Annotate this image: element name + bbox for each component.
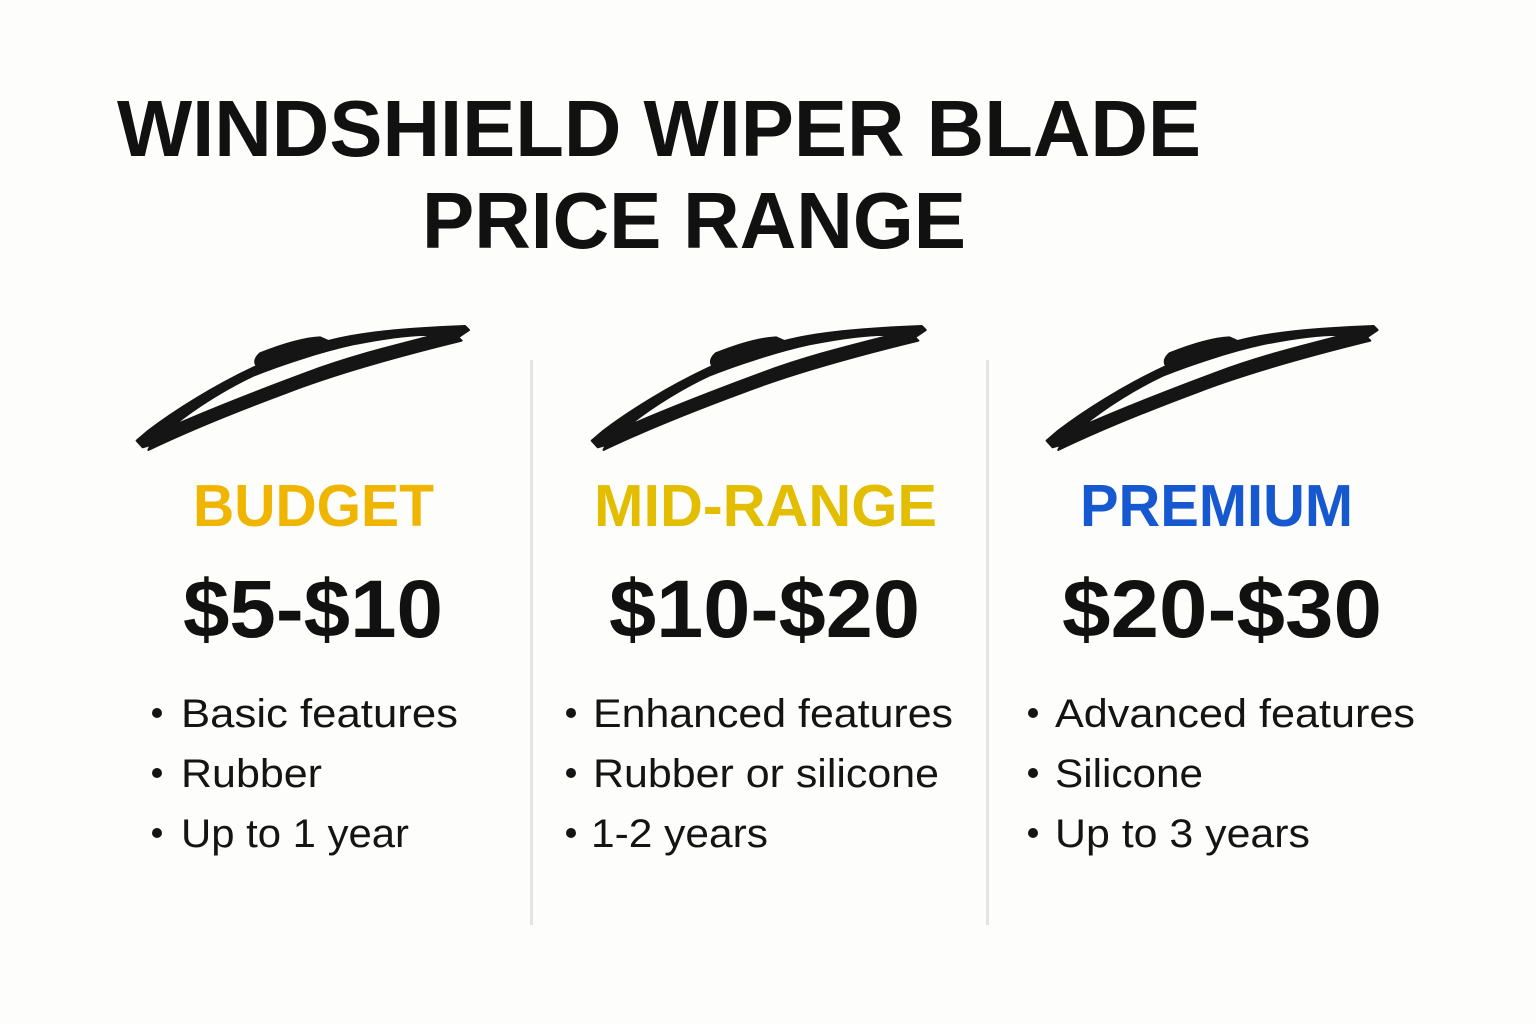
icon: wiper blade budget — [137, 326, 469, 450]
feature list: mid-range — [566, 692, 953, 856]
feature list: budget: Rubber — [181, 752, 322, 796]
heading: premium: PREMIUM — [1080, 473, 1353, 539]
panel: budget — [137, 326, 469, 856]
price: mid-range: $10-$20 — [609, 564, 920, 655]
price: budget: $5-$10 — [183, 564, 443, 655]
feature list: premium: Advanced features — [1055, 692, 1415, 736]
feature list: premium — [1028, 692, 1415, 856]
title: PRICE RANGE — [422, 176, 966, 265]
feature list: mid-range: Rubber or silicone — [593, 752, 939, 796]
icon: wiper blade mid-range — [592, 326, 926, 450]
panel: premium — [1028, 326, 1415, 856]
feature list: budget: Up to 1 year — [181, 812, 409, 856]
feature list: budget — [152, 692, 458, 856]
icon: wiper blade premium — [1047, 326, 1378, 450]
heading: budget: BUDGET — [193, 473, 434, 539]
title: WINDSHIELD WIPER BLADE — [117, 84, 1201, 173]
feature list: mid-range: Enhanced features — [593, 692, 953, 736]
feature list: premium: Silicone — [1055, 752, 1203, 796]
heading: mid-range: MID-RANGE — [594, 473, 937, 539]
panel: mid-range — [566, 326, 953, 856]
price: premium: $20-$30 — [1062, 564, 1382, 655]
feature list: premium: Up to 3 years — [1055, 812, 1310, 856]
title — [117, 84, 1201, 265]
feature list: mid-range: 1-2 years — [591, 812, 768, 856]
feature list: budget: Basic features — [181, 692, 458, 736]
